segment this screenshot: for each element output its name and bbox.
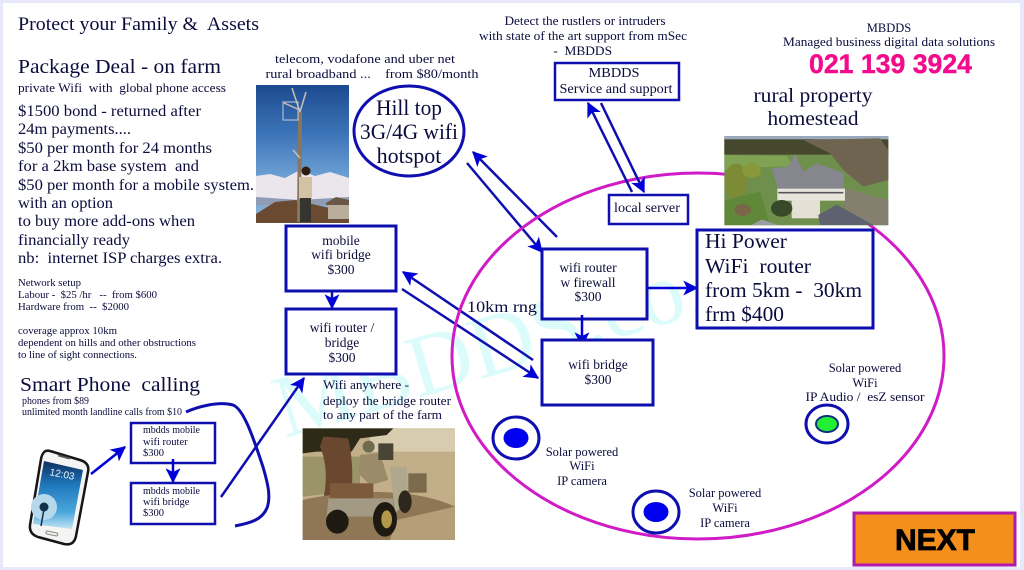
text block: network setup: dependent on hills and other obstructions [18, 338, 196, 349]
text block: network setup: Hardware from -- $2000 [18, 302, 129, 313]
box: service and support: MBDDS [588, 65, 640, 80]
box: wifi router with firewall: wifi router [559, 260, 617, 275]
box: mobile wifi bridge: $300 [328, 262, 355, 277]
arrow: router to hotspot [473, 152, 557, 237]
package subheading: private Wifi with global phone access [18, 81, 226, 95]
label: audio sensor: Solar powered [829, 361, 902, 375]
package terms: to buy more add-ons when [18, 213, 195, 230]
package terms: for a 2km base system and [18, 158, 199, 175]
text block: wifi anywhere [323, 377, 452, 422]
box: mbdds mobile wifi router: $300 [143, 448, 164, 459]
heading: broadband: telecom, vodafone and uber net [275, 51, 455, 66]
heading: rural property: homestead [768, 108, 858, 130]
arrow: phone to mobile router [91, 447, 125, 474]
label: camera bottom: IP camera [700, 516, 750, 530]
arrow: bridge link downward [402, 289, 538, 378]
package terms: with an option [18, 195, 113, 212]
label: camera left: WiFi [569, 459, 595, 473]
label: range: 10km rng [467, 299, 537, 316]
package terms: $50 per month for 24 months [18, 140, 212, 157]
photo: homestead [724, 136, 888, 225]
text block: MBDDS contact [783, 21, 995, 79]
box: mbdds mobile wifi bridge: $300 [143, 508, 164, 519]
box: mobile wifi bridge: wifi bridge [311, 247, 371, 262]
text block: network setup: Network setup [18, 278, 81, 289]
box: hi power wifi router [697, 229, 873, 328]
box: wifi router bridge: bridge [325, 335, 359, 350]
box: mbdds mobile wifi router: mbdds mobile [143, 425, 200, 436]
text block: detect rustlers [479, 14, 687, 58]
box: wifi router with firewall: w firewall [560, 275, 616, 290]
text block: wifi anywhere: Wifi anywhere - [323, 377, 409, 392]
arrow: hotspot to router [467, 163, 542, 252]
box: mobile wifi bridge: mobile [322, 233, 360, 248]
box: wifi router bridge: wifi router / [310, 320, 374, 335]
photo: hilltop mast [256, 85, 349, 223]
heading: rural property [754, 85, 872, 130]
box: service and support [555, 63, 679, 100]
box: mobile wifi bridge [286, 226, 396, 291]
package terms: nb: internet ISP charges extra. [18, 250, 222, 267]
package terms: $50 per month for a mobile system. [18, 177, 254, 194]
text block: detect rustlers: with state of the art support from mSec [479, 29, 687, 43]
arrow: router to bridge [581, 315, 583, 346]
smart phone details: phones from $89 [22, 396, 89, 407]
icon: camera sensor left [493, 417, 539, 459]
arrow: server to support [588, 103, 632, 192]
arrow: support to server [601, 103, 644, 192]
box: mbdds mobile wifi bridge: mbdds mobile [143, 486, 200, 497]
label: camera bottom [689, 486, 762, 530]
box: service and support: Service and support [560, 81, 673, 96]
box: wifi router bridge: $300 [328, 350, 356, 365]
text block: detect rustlers: Detect the rustlers or intruders [504, 14, 666, 28]
smart phone details: unlimited month landline calls from $10 [22, 407, 182, 418]
box: mbdds mobile wifi router: wifi router [143, 437, 188, 448]
heading: broadband [266, 51, 479, 81]
boundary: property range ellipse [452, 173, 944, 539]
text block: network setup: coverage approx 10km [18, 326, 117, 337]
icon: smartphone: 12:03 [49, 467, 76, 483]
box: wifi router with firewall [542, 249, 647, 319]
arrow: bridge link upward [403, 272, 533, 360]
text block: wifi anywhere: deploy the bridge router [323, 393, 452, 408]
title: Protect your Family & Assets [18, 15, 259, 35]
box: hi power wifi router: frm $400 [705, 302, 784, 326]
label: camera bottom: Solar powered [689, 486, 762, 500]
label: camera left: Solar powered [546, 445, 619, 459]
callout: hill top hotspot: Hill top [376, 95, 442, 120]
label: camera bottom: WiFi [712, 501, 738, 515]
photo: quad bike [303, 428, 455, 540]
panel: package deal text [18, 15, 259, 267]
box: mbdds mobile wifi bridge [131, 483, 215, 524]
button: next [854, 513, 1015, 565]
icon: smartphone [30, 451, 88, 544]
package terms: financially ready [18, 232, 130, 249]
label: audio sensor [806, 361, 925, 404]
heading: smart phone calling: Smart Phone calling [20, 374, 200, 396]
arrow: mobile bridge to wifi router [221, 378, 304, 497]
phone number: 021 139 3924 [809, 49, 972, 79]
smart phone details [22, 396, 182, 418]
heading: broadband: rural broadband ... from $80/month [266, 66, 479, 81]
box: wifi bridge [542, 340, 653, 405]
box: mbdds mobile wifi router [131, 423, 215, 463]
icon: audio sensor [806, 405, 848, 443]
text block: network setup [18, 278, 196, 361]
text block: network setup: to line of sight connections. [18, 350, 137, 361]
box: local server [609, 195, 688, 224]
box: hi power wifi router: WiFi router [705, 254, 811, 278]
package heading: Package Deal - on farm [18, 56, 221, 78]
package terms: $1500 bond - returned after [18, 103, 202, 120]
text block: wifi anywhere: to any part of the farm [323, 407, 442, 422]
box: wifi bridge: $300 [584, 372, 612, 387]
arrow: curved phone link [186, 404, 269, 526]
text block: MBDDS contact: Managed business digital data solutions [783, 35, 995, 49]
label: audio sensor: WiFi [852, 376, 878, 390]
text block: network setup: Labour - $25 /hr -- from $600 [18, 290, 157, 301]
callout: hill top hotspot: 3G/4G wifi [360, 119, 458, 144]
heading: smart phone calling [20, 374, 200, 418]
label: audio sensor: IP Audio / esZ sensor [806, 390, 925, 404]
label: camera left: IP camera [557, 474, 607, 488]
box: mbdds mobile wifi bridge: wifi bridge [143, 497, 190, 508]
arrow: mobile bridge to router bridge [331, 291, 333, 308]
box: hi power wifi router: from 5km - 30km [705, 278, 862, 302]
heading: rural property: rural property [754, 85, 872, 107]
watermark: MBDDS.co.nz [263, 211, 797, 457]
callout: hill top hotspot [354, 86, 464, 176]
text block: MBDDS contact: MBDDS [867, 21, 911, 35]
box: wifi router with firewall: $300 [574, 289, 602, 304]
box: local server: local server [614, 200, 681, 215]
text block: detect rustlers: - MBDDS [550, 44, 612, 58]
arrow: mobile router to mobile bridge [172, 459, 174, 482]
icon: camera sensor bottom [633, 491, 679, 533]
callout: hill top hotspot: hotspot [377, 143, 441, 168]
package terms [18, 103, 254, 267]
label: camera left [546, 445, 619, 488]
button: next: NEXT [895, 524, 975, 557]
box: hi power wifi router: Hi Power [705, 229, 787, 253]
box: wifi bridge: wifi bridge [568, 357, 628, 372]
box: wifi router bridge [286, 309, 396, 374]
package terms: 24m payments.... [18, 121, 131, 138]
arrow: router to hi power [647, 287, 697, 289]
